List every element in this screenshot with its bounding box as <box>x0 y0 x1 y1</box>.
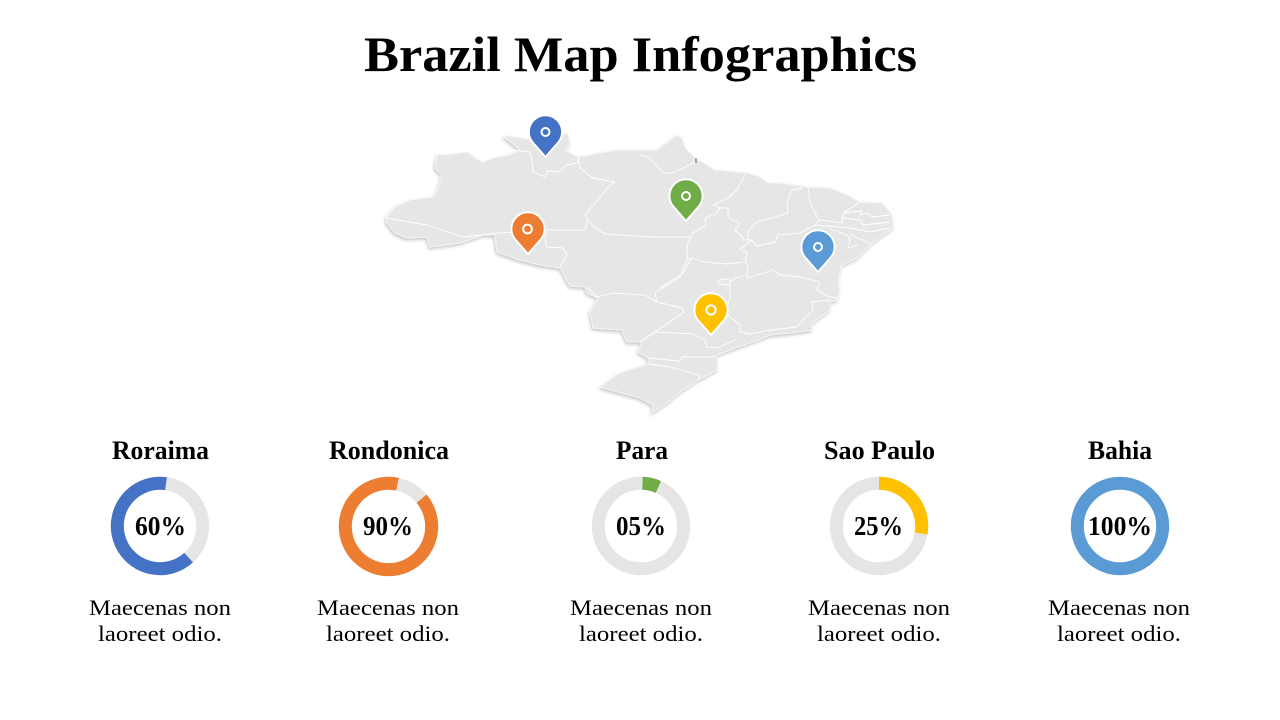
country shape <box>386 133 893 413</box>
donut chart 05% <box>598 483 684 569</box>
pin: Bahia <box>801 230 835 272</box>
heading: Roraima <box>112 436 209 465</box>
pin: Sao Paulo <box>694 293 728 335</box>
panel: Para <box>570 436 712 646</box>
panel: Roraima <box>89 436 231 646</box>
donut chart 100% <box>1077 483 1163 569</box>
state borders <box>386 150 890 380</box>
description <box>1048 595 1190 646</box>
description: Maecenas non <box>89 595 231 620</box>
description: laoreet odio. <box>98 621 222 646</box>
heading: Para <box>616 436 668 465</box>
donut chart 25%: 25% <box>854 511 903 541</box>
description: Maecenas non <box>317 595 459 620</box>
description <box>89 595 231 646</box>
donut chart 05%: 05% <box>616 511 666 541</box>
heading: Sao Paulo <box>824 436 935 465</box>
title: Brazil Map Infographics <box>364 26 917 82</box>
donut chart 100%: 100% <box>1088 511 1152 541</box>
pin: Rondonica <box>511 212 545 254</box>
donut chart 60% <box>117 483 203 569</box>
dark coastal speck <box>695 158 697 163</box>
heading: Rondonica <box>329 436 449 465</box>
panel: Bahia <box>1048 436 1190 646</box>
description <box>570 595 712 646</box>
description: laoreet odio. <box>579 621 703 646</box>
donut chart 90%: 90% <box>363 511 413 541</box>
description: laoreet odio. <box>1057 621 1181 646</box>
map of Brazil <box>386 115 893 413</box>
donut chart 90% <box>345 483 432 570</box>
pin: Roraima <box>529 115 562 157</box>
description: Maecenas non <box>1048 595 1190 620</box>
panel: Rondonica <box>317 436 459 646</box>
donut chart 25% <box>836 483 922 569</box>
description: Maecenas non <box>808 595 950 620</box>
description: laoreet odio. <box>817 621 941 646</box>
pin: Para <box>669 179 703 221</box>
description <box>808 595 950 646</box>
description: laoreet odio. <box>326 621 450 646</box>
description <box>317 595 459 646</box>
description: Maecenas non <box>570 595 712 620</box>
heading: Bahia <box>1088 436 1152 465</box>
donut chart 60%: 60% <box>135 511 186 541</box>
panel: Sao Paulo <box>808 436 950 646</box>
